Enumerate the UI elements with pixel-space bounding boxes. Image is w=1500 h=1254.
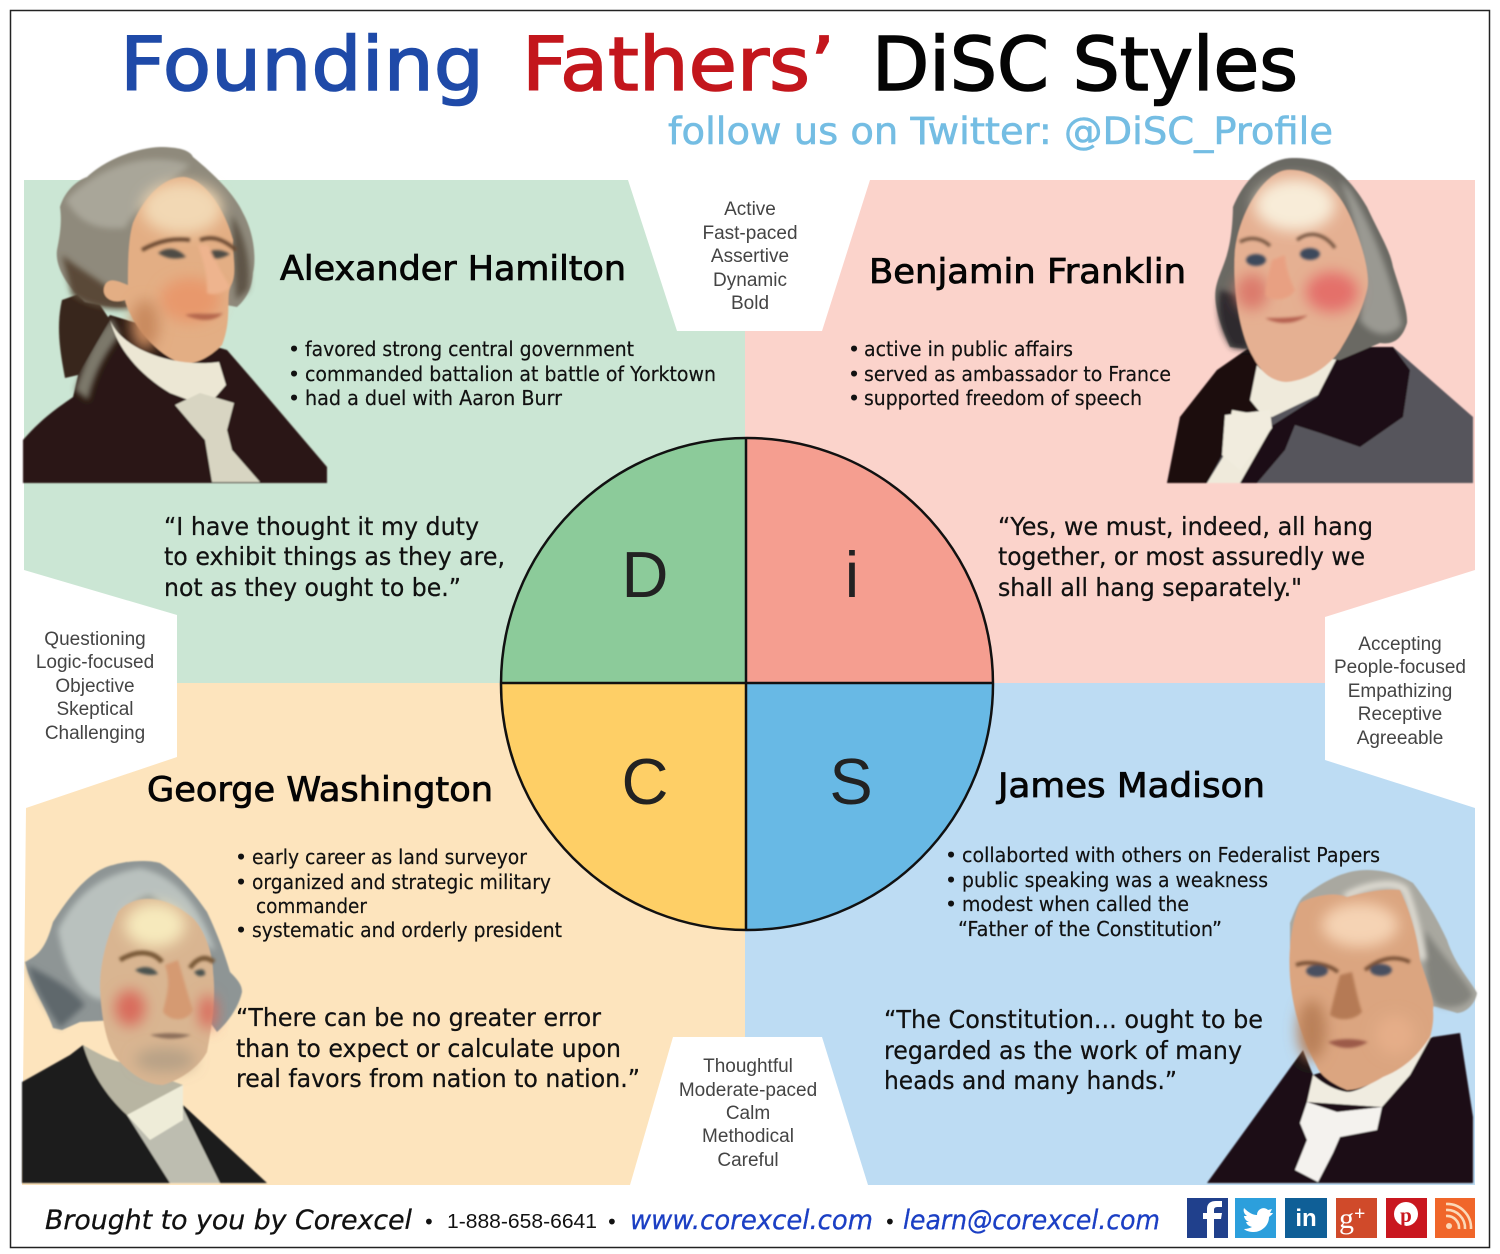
Franklin quote (998, 512, 1373, 602)
S traits: Careful (717, 1150, 779, 1171)
C traits: Skeptical (56, 699, 134, 720)
footer bullet separator: • (423, 1210, 435, 1234)
Franklin quote: shall all hang separately." (998, 573, 1302, 602)
Franklin facts: supported freedom of speech (864, 386, 1142, 410)
Washington facts: organized and strategic military (252, 870, 551, 894)
Washington facts: • (235, 845, 247, 869)
Washington facts: systematic and orderly president (252, 918, 562, 942)
i traits: Accepting (1358, 634, 1442, 655)
Washington facts: commander (256, 894, 368, 918)
footer credit: Brought to you by Corexcel (45, 1205, 412, 1236)
footer bullet separator: • (606, 1210, 618, 1234)
footer bullet separator: • (884, 1210, 896, 1234)
S traits: Moderate-paced (679, 1080, 817, 1101)
Franklin facts: • (848, 337, 860, 361)
Hamilton facts: commanded battalion at battle of Yorktown (305, 362, 716, 386)
Washington quote: real favors from nation to nation.” (236, 1064, 640, 1093)
Hamilton facts: had a duel with Aaron Burr (305, 386, 563, 410)
Franklin quote: together, or most assuredly we (998, 542, 1365, 571)
Washington facts: • (235, 918, 247, 942)
D traits: Bold (731, 293, 769, 314)
icon: google plus (1336, 1198, 1377, 1238)
S traits: Thoughtful (703, 1056, 793, 1077)
Washington name: George Washington (147, 770, 493, 810)
icon: google plus: g (1339, 1202, 1354, 1235)
D traits: Dynamic (713, 270, 787, 291)
S traits: Methodical (702, 1126, 794, 1147)
Washington quote (236, 1003, 640, 1093)
Madison facts: • (945, 843, 957, 867)
C traits (36, 629, 154, 744)
Washington facts: early career as land surveyor (252, 845, 528, 869)
title: Founding (120, 22, 484, 108)
panel: D quadrant background (24, 180, 745, 683)
twitter subtitle: follow us on Twitter: @DiSC_Profile (668, 110, 1333, 153)
S traits: Calm (726, 1103, 770, 1124)
Franklin facts: served as ambassador to France (864, 362, 1171, 386)
Madison facts: “Father of the Constitution” (958, 917, 1222, 941)
portrait: Benjamin Franklin (1167, 158, 1473, 483)
i traits: Empathizing (1348, 681, 1452, 702)
icon: google plus: + (1354, 1203, 1365, 1225)
Hamilton quote: “I have thought it my duty (164, 512, 479, 541)
Franklin facts: active in public affairs (864, 337, 1073, 361)
title: DiSC Styles (872, 22, 1298, 108)
portrait: Alexander Hamilton (23, 147, 327, 483)
panel: S quadrant background (745, 683, 1475, 1185)
D traits: Active (724, 199, 776, 220)
phone: 1-888-658-6641 (447, 1210, 597, 1233)
portrait: James Madison (1207, 870, 1477, 1183)
DiSC circle chart: D (622, 538, 668, 611)
Madison quote (884, 1005, 1263, 1095)
Franklin name: Benjamin Franklin (869, 252, 1186, 292)
icon: twitter (1235, 1198, 1276, 1238)
Franklin facts: • (848, 362, 860, 386)
DiSC circle chart: i (845, 538, 859, 611)
C traits: Logic-focused (36, 652, 154, 673)
Washington facts: • (235, 870, 247, 894)
Hamilton facts: • (288, 337, 300, 361)
icon: pinterest: p (1400, 1203, 1412, 1227)
icon: linkedin: in (1295, 1205, 1317, 1232)
C traits: Questioning (44, 629, 146, 650)
Washington quote: than to expect or calculate upon (236, 1034, 621, 1063)
D traits: Fast-paced (702, 223, 798, 244)
Franklin quote: “Yes, we must, indeed, all hang (998, 512, 1373, 541)
i traits (1334, 634, 1466, 749)
DiSC circle chart: C (622, 745, 668, 818)
Hamilton facts: • (288, 386, 300, 410)
DiSC circle chart: S (829, 745, 873, 818)
Hamilton quote: to exhibit things as they are, (164, 542, 505, 571)
Madison facts (945, 843, 1380, 941)
panel: i quadrant background (745, 180, 1475, 683)
panel: C quadrant background (22, 683, 745, 1185)
Hamilton name: Alexander Hamilton (280, 249, 626, 289)
Franklin facts: • (848, 386, 860, 410)
C traits: Objective (55, 676, 135, 697)
D traits: Assertive (711, 246, 789, 267)
Hamilton facts: • (288, 362, 300, 386)
website: www.corexcel.com (630, 1205, 873, 1236)
Madison quote: “The Constitution... ought to be (884, 1005, 1263, 1034)
i traits: Receptive (1358, 704, 1442, 725)
Hamilton facts (288, 337, 716, 410)
email: learn@corexcel.com (903, 1205, 1160, 1236)
icon: linkedin (1285, 1198, 1327, 1238)
icon: facebook (1187, 1198, 1228, 1238)
Madison name: James Madison (996, 766, 1265, 806)
Hamilton quote (164, 512, 505, 602)
Hamilton quote: not as they ought to be.” (164, 573, 461, 602)
icon: pinterest (1386, 1198, 1427, 1238)
S traits (679, 1056, 817, 1171)
Madison facts: modest when called the (962, 892, 1189, 916)
Hamilton facts: favored strong central government (305, 337, 634, 361)
i traits: People-focused (1334, 657, 1466, 678)
Madison facts: • (945, 868, 957, 892)
portrait: George Washington (22, 861, 267, 1183)
Madison facts: public speaking was a weakness (962, 868, 1268, 892)
title (120, 22, 1298, 108)
Madison facts: collaborted with others on Federalist Papers (962, 843, 1380, 867)
Washington quote: “There can be no greater error (236, 1003, 602, 1032)
title: Fathers’ (522, 22, 835, 108)
i traits: Agreeable (1357, 728, 1443, 749)
Franklin facts (848, 337, 1171, 410)
Madison facts: • (945, 892, 957, 916)
Washington facts (235, 845, 562, 942)
Madison quote: regarded as the work of many (884, 1036, 1242, 1065)
icon: rss (1435, 1198, 1475, 1238)
C traits: Challenging (45, 723, 145, 744)
Madison quote: heads and many hands.” (884, 1066, 1177, 1095)
DiSC circle chart (501, 438, 993, 930)
D traits (702, 199, 798, 314)
